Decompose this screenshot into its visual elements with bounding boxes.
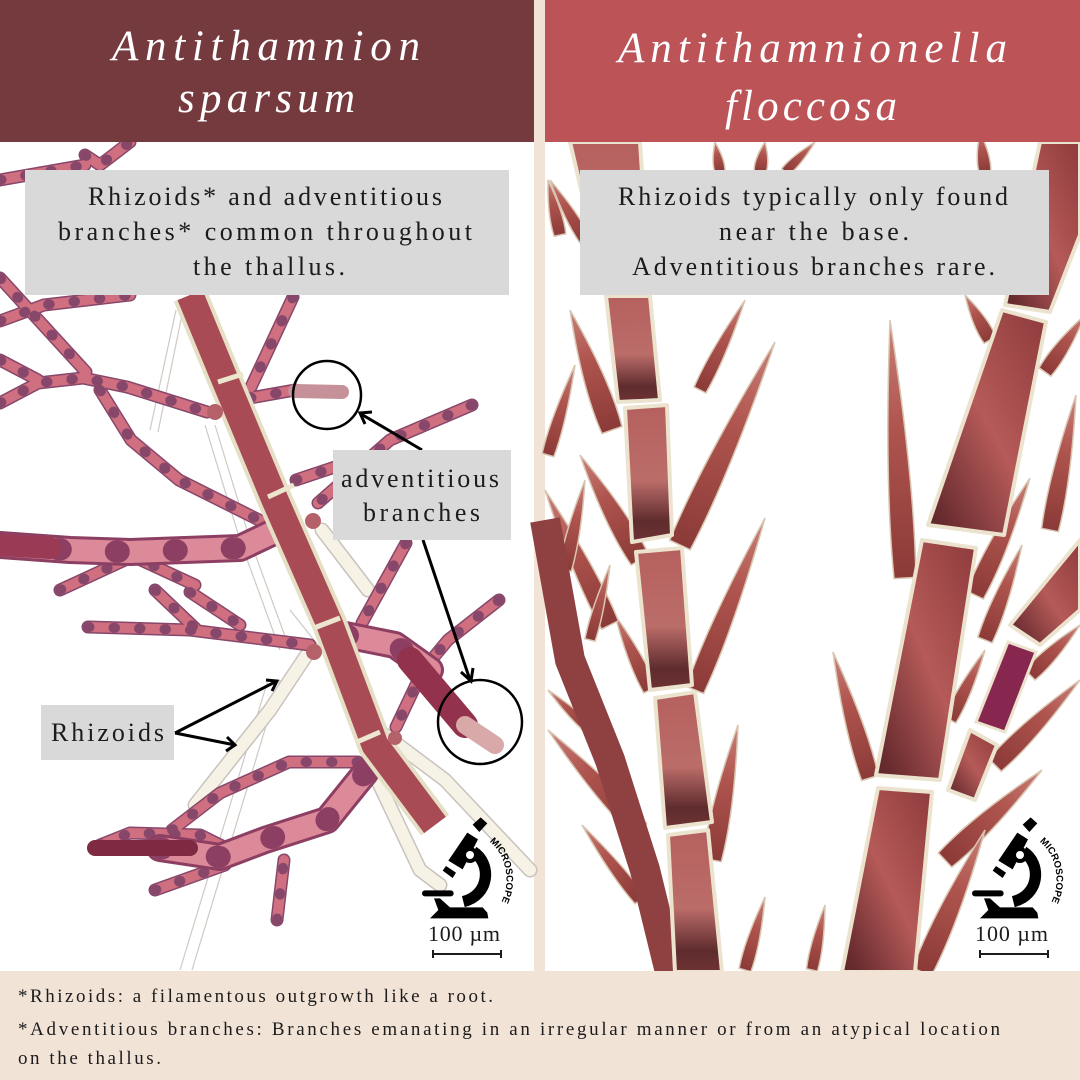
text box: left description: branches* common throughout <box>58 217 473 246</box>
icon: microscope left: MICROSCOPE <box>490 837 514 904</box>
header: Antithamnionella floccosa <box>545 0 1080 142</box>
central axis cells <box>570 142 722 972</box>
right axis cells <box>842 142 1080 972</box>
label: adventitious branches: adventitious <box>341 464 499 493</box>
pale rhizoids <box>195 530 530 885</box>
scale bar right <box>980 950 1048 958</box>
circle: upper adventitious branch <box>293 361 361 429</box>
node cells <box>207 404 402 745</box>
icon: microscope right <box>972 817 1064 918</box>
panel: Antithamnionella floccosa photo <box>536 131 1080 977</box>
header: Antithamnionella floccosa: Antithamnionella <box>615 25 1007 72</box>
footer definitions: on the thallus. <box>18 1048 161 1069</box>
header: Antithamnionella floccosa: floccosa <box>725 83 897 130</box>
text box: right description: Rhizoids typically only found <box>618 182 1008 211</box>
main axis <box>190 295 435 825</box>
text box: right description: near the base. <box>719 217 909 246</box>
text box: left description <box>25 170 509 295</box>
header: Antithamnion sparsum <box>0 0 534 142</box>
arrow: to upper circle <box>360 412 422 450</box>
scale bar left <box>433 950 501 958</box>
footer definitions: *Rhizoids: a filamentous outgrowth like a root. <box>18 986 493 1007</box>
footer definitions <box>0 971 1080 1080</box>
label: Rhizoids <box>41 705 174 760</box>
footer definitions: *Adventitious branches: Branches emanating in an irregular manner or from an atypical location <box>18 1019 1000 1040</box>
text box: left description: the thallus. <box>193 252 345 281</box>
circle: lower adventitious branch <box>438 680 522 764</box>
header: Antithamnion sparsum: Antithamnion <box>109 23 420 70</box>
label: adventitious branches <box>333 450 511 540</box>
thicker pink filaments <box>0 530 430 857</box>
label: adventitious branches: branches <box>363 498 480 527</box>
header: Antithamnion sparsum: sparsum <box>178 75 355 122</box>
text box: right description: Adventitious branches rare. <box>632 252 995 281</box>
pink filaments <box>0 142 499 920</box>
text box: left description: Rhizoids* and adventitious <box>88 182 442 211</box>
scale label left: 100 µm <box>428 921 500 946</box>
branchlets <box>536 131 1080 977</box>
icon: microscope left <box>422 817 514 918</box>
scale label right: 100 µm <box>975 921 1048 946</box>
left chain of cells <box>545 520 670 972</box>
arrows: to rhizoids <box>175 680 277 751</box>
arrow: to lower circle <box>423 540 473 681</box>
dark base knots <box>0 391 495 848</box>
purple cell <box>976 642 1036 732</box>
thin rhizoid lines <box>150 310 330 970</box>
panel: Antithamnion sparsum photo <box>0 142 534 971</box>
text box: right description <box>580 170 1049 295</box>
label: Rhizoids: Rhizoids <box>51 718 164 747</box>
icon: microscope right: MICROSCOPE <box>1040 837 1064 904</box>
